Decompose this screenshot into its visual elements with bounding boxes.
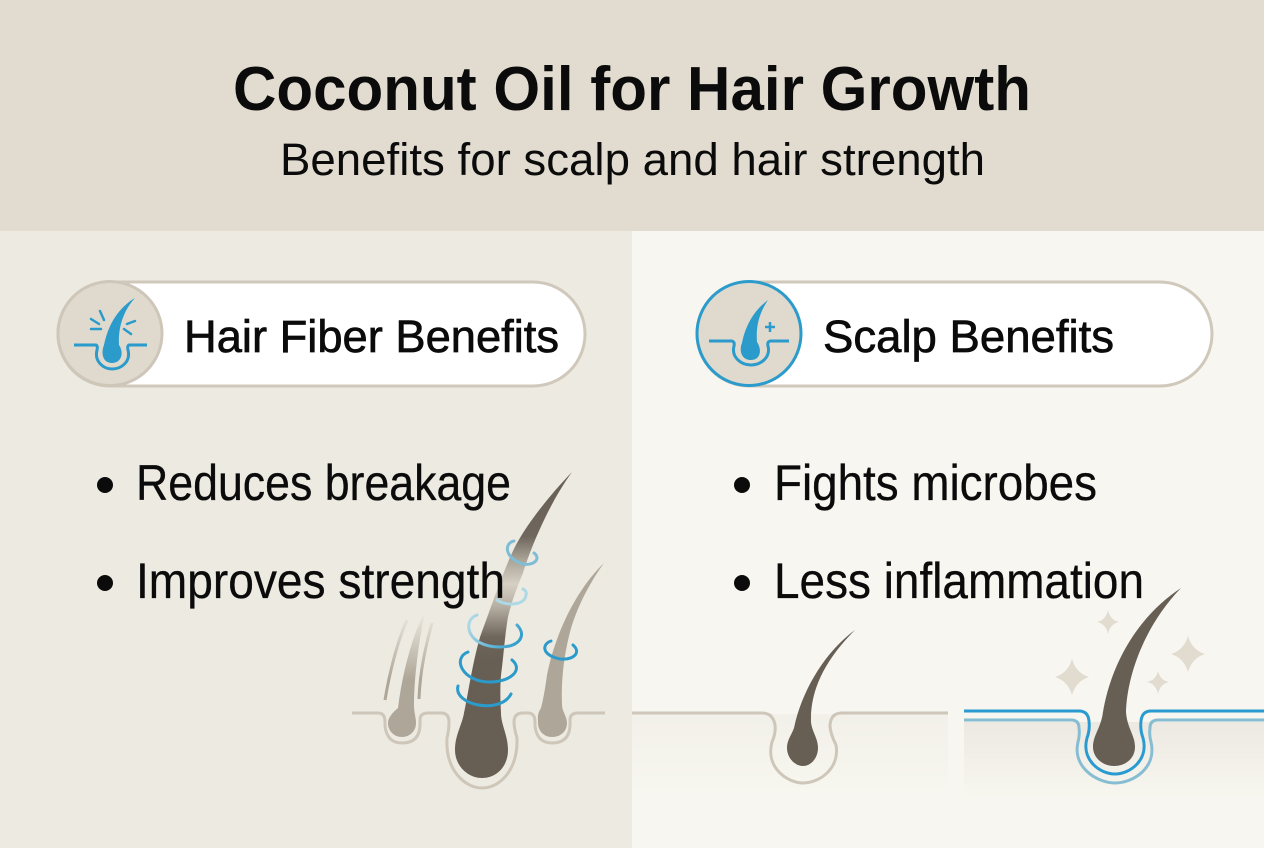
inner blue line <box>964 711 1264 774</box>
pill <box>697 282 1212 386</box>
subtitle: Benefits for scalp and hair strength <box>280 134 985 185</box>
section header: scalp benefits <box>697 282 1212 386</box>
section header: hair fiber benefits <box>58 282 585 386</box>
skin line <box>632 713 948 783</box>
bullet list: scalp: Fights microbes <box>774 455 1097 511</box>
hair <box>787 630 855 766</box>
right hair <box>538 563 604 737</box>
pill <box>58 282 585 386</box>
sparkles <box>1055 610 1205 695</box>
bullet list: scalp: Less inflammation <box>774 553 1144 609</box>
outer blue line <box>964 720 1264 783</box>
bullet list: scalp <box>734 455 1144 609</box>
illustration: hair fiber follicles <box>352 472 605 788</box>
heading: Hair Fiber Benefits <box>184 311 559 362</box>
skin shading <box>632 714 948 794</box>
icon: hair with plus <box>697 282 801 386</box>
right hair ring <box>545 641 577 659</box>
illustration: plain scalp follicle <box>632 630 948 794</box>
main hair <box>455 472 572 778</box>
bullet list: hair fiber <box>97 455 511 609</box>
heading: Scalp Benefits <box>823 311 1114 362</box>
hair <box>1093 588 1181 766</box>
left faded hair <box>385 612 432 737</box>
bullet list: hair fiber: Improves strength <box>136 553 505 609</box>
panel: hair fiber background <box>0 231 632 848</box>
icon: hair with breakage marks <box>58 282 162 386</box>
bullet list: hair fiber: Reduces breakage <box>136 455 511 511</box>
panel: scalp background <box>632 231 1264 848</box>
header band <box>0 0 1264 231</box>
title: Coconut Oil for Hair Growth <box>233 55 1031 124</box>
skin shading <box>964 722 1264 797</box>
skin line with follicles <box>352 713 605 788</box>
illustration: healthy scalp follicle <box>964 588 1264 797</box>
main hair rings <box>458 541 537 706</box>
